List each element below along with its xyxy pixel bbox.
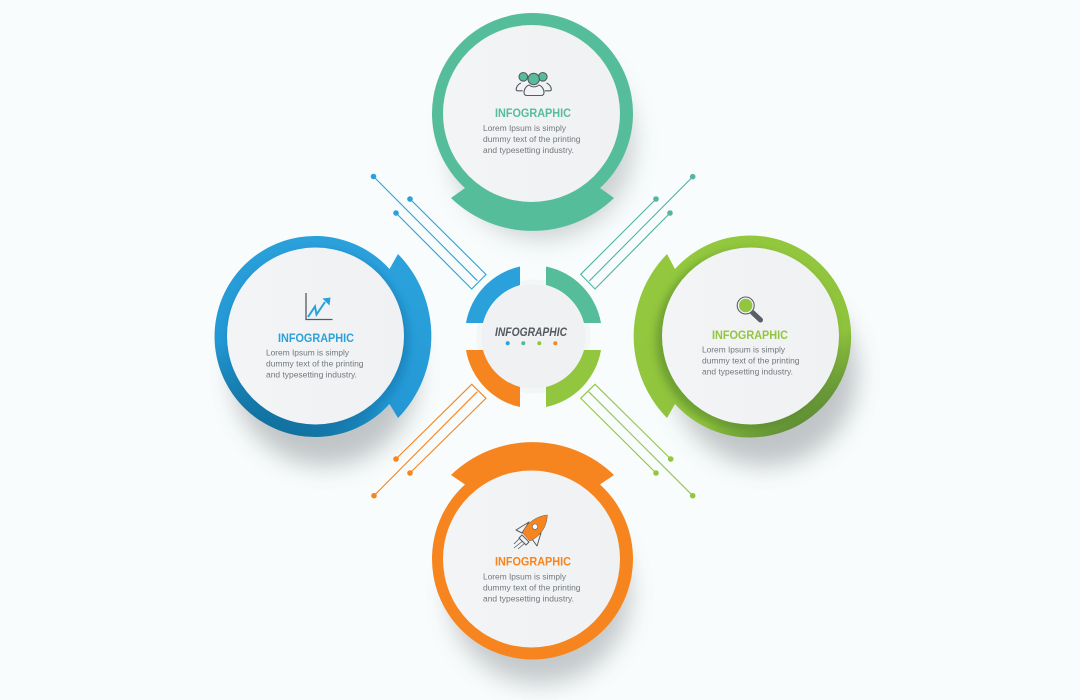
orange ring with wedge	[432, 442, 633, 659]
hub title: INFOGRAPHIC	[495, 325, 567, 339]
hub segment: green	[546, 350, 601, 407]
white disc	[443, 470, 620, 648]
hub dots	[506, 341, 557, 345]
icon: rising chart	[306, 293, 332, 320]
body text	[483, 123, 581, 155]
hub disc	[482, 284, 586, 388]
body text: and typesetting industry.	[483, 594, 574, 604]
body text	[266, 348, 364, 380]
blue ring with wedge	[215, 236, 431, 437]
panel: right green circle	[634, 235, 857, 466]
body text: dummy text of the printing	[266, 358, 364, 368]
heading: INFOGRAPHIC	[495, 556, 572, 568]
heading: INFOGRAPHIC	[278, 332, 355, 345]
hub segment: teal	[546, 266, 601, 323]
hub segment: orange	[466, 350, 520, 407]
heading: INFOGRAPHIC	[495, 107, 572, 120]
body text: and typesetting industry.	[483, 145, 574, 155]
icon: magnifier	[737, 297, 760, 320]
white disc	[662, 248, 839, 424]
white disc	[227, 248, 404, 424]
panel: bottom orange circle	[432, 442, 633, 684]
body text: and typesetting industry.	[702, 366, 793, 376]
connector lines: teal	[581, 174, 696, 289]
body text: Lorem Ipsum is simply	[483, 572, 567, 582]
green ring with wedge	[634, 235, 851, 438]
heading: INFOGRAPHIC	[712, 329, 789, 342]
connector lines: orange	[371, 384, 486, 499]
infographic canvas	[214, 13, 868, 695]
body text: dummy text of the printing	[483, 582, 581, 592]
panel: left blue circle	[215, 236, 431, 466]
body text: dummy text of the printing	[702, 356, 800, 366]
teal ring with wedge	[432, 13, 633, 231]
panel: top teal circle	[432, 13, 634, 239]
body text: Lorem Ipsum is simply	[702, 344, 786, 354]
body text	[483, 572, 581, 604]
body text: dummy text of the printing	[483, 134, 581, 144]
body text	[702, 344, 800, 376]
connector lines: blue	[371, 174, 486, 289]
panel: center hub	[466, 266, 601, 407]
icon: rocket	[514, 515, 547, 549]
body text: Lorem Ipsum is simply	[483, 123, 567, 133]
white disc	[443, 25, 620, 202]
body text: Lorem Ipsum is simply	[266, 348, 350, 358]
hub segment: blue	[466, 266, 520, 323]
icon: people	[516, 72, 551, 96]
body text: and typesetting industry.	[266, 370, 357, 380]
connector lines: green	[581, 384, 696, 499]
